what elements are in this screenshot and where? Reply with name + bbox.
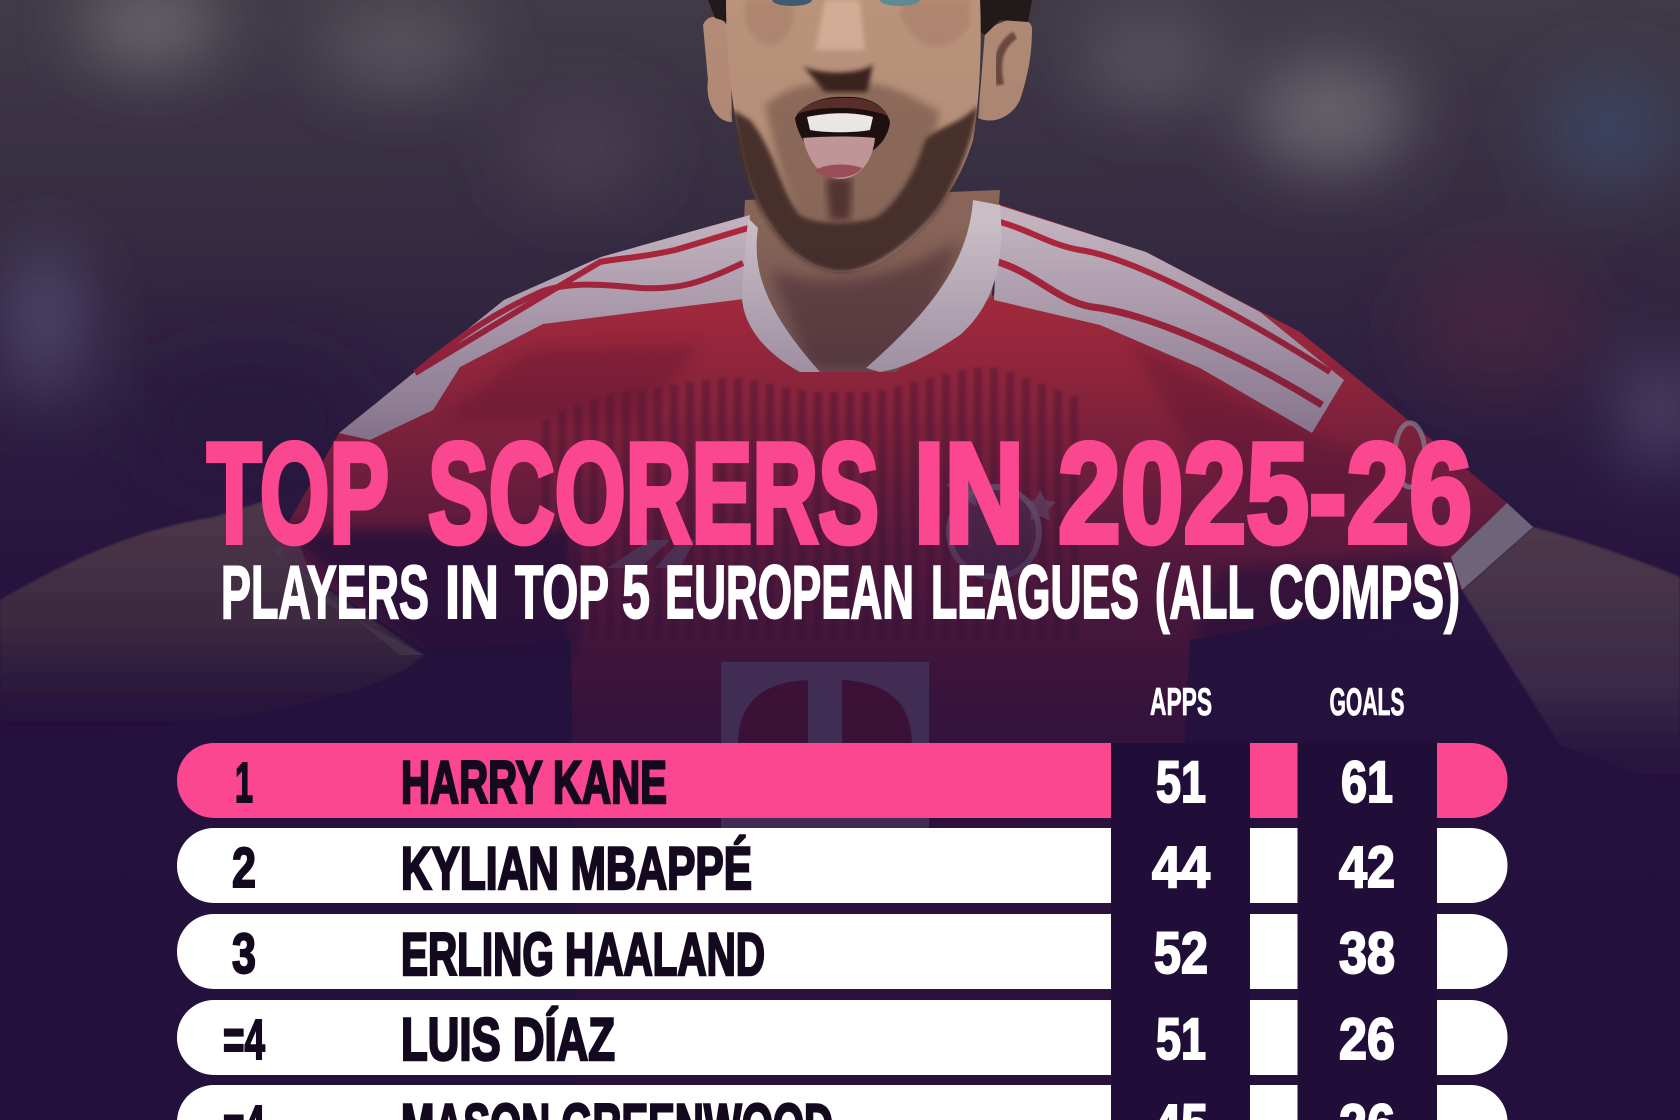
stubble mid tone bbox=[765, 82, 940, 235]
face bbox=[726, 0, 981, 272]
T logo on jersey bbox=[721, 662, 929, 832]
right sleeve shadow bbox=[1190, 555, 1462, 650]
tongue tip bbox=[815, 164, 862, 178]
left sleeve shadow bbox=[280, 528, 575, 660]
subtitle: PLAYERS bbox=[221, 550, 429, 634]
column heading: goals: GOALS bbox=[1330, 681, 1404, 724]
table row 1: Harry Kane: HARRY KANE bbox=[401, 749, 667, 816]
subtitle: EUROPEAN bbox=[665, 550, 914, 634]
table row 3: Erling Haaland: ERLING HAALAND bbox=[401, 921, 765, 988]
jersey body bbox=[272, 203, 1507, 1120]
eyes bbox=[772, 0, 812, 6]
title: TOP bbox=[207, 414, 389, 573]
right shoulder stripes bbox=[994, 205, 1344, 433]
collar bbox=[742, 218, 820, 372]
table row 2: Kylian Mbappé: 44 bbox=[1152, 835, 1210, 900]
left shoulder stripes bbox=[339, 215, 750, 440]
subtitle: COMPS) bbox=[1269, 550, 1460, 634]
table row 1: Harry Kane: 51 bbox=[1156, 750, 1206, 815]
sleeve badge bbox=[1395, 423, 1425, 487]
table row 4: Luis Díaz: 26 bbox=[1339, 1007, 1395, 1072]
column heading: apps: APPS bbox=[1150, 681, 1212, 724]
nostrils bbox=[803, 64, 873, 92]
subtitle: TOP bbox=[515, 550, 609, 634]
table row 4: Luis Díaz bbox=[177, 1000, 1508, 1075]
title: IN bbox=[914, 414, 1024, 573]
crest bbox=[946, 470, 1056, 577]
table row 1: Harry Kane: 61 bbox=[1341, 750, 1393, 815]
cheek shading bbox=[745, 0, 970, 46]
title: 2025-26 bbox=[1058, 414, 1472, 573]
left arm bbox=[0, 500, 424, 740]
table row 4: Luis Díaz: LUIS DÍAZ bbox=[401, 1006, 615, 1073]
neck bbox=[740, 190, 1000, 385]
subtitle: 5 bbox=[622, 550, 650, 634]
subtitle bbox=[221, 550, 1460, 634]
table row 3: Erling Haaland: 3 bbox=[232, 922, 256, 986]
right arm bbox=[1462, 527, 1680, 790]
stat column backing: apps bbox=[1111, 743, 1250, 1120]
title: SCORERS bbox=[428, 414, 879, 573]
right sleeve hem bbox=[1451, 503, 1533, 590]
kit manufacturer stripes bbox=[607, 540, 695, 568]
mouth bbox=[795, 97, 890, 158]
teeth bbox=[807, 113, 873, 132]
jersey ribbing bbox=[546, 368, 1074, 640]
soul patch bbox=[826, 178, 852, 220]
player photo illustration bbox=[272, 0, 1507, 1120]
table row 4: Luis Díaz: 51 bbox=[1156, 1007, 1206, 1072]
table row 5: Mason Greenwood bbox=[177, 1085, 1508, 1120]
table row 2: Kylian Mbappé bbox=[177, 828, 1508, 903]
table row 2: Kylian Mbappé: 42 bbox=[1339, 835, 1395, 900]
subtitle: IN bbox=[445, 550, 499, 634]
table row 3: Erling Haaland: 38 bbox=[1339, 921, 1395, 986]
title bbox=[207, 414, 1472, 573]
table row 4: Luis Díaz: =4 bbox=[223, 1008, 265, 1072]
ears bbox=[703, 17, 732, 122]
table row 1: Harry Kane bbox=[177, 743, 1508, 818]
table row 3: Erling Haaland bbox=[177, 914, 1508, 989]
stat column backing: goals bbox=[1298, 743, 1437, 1120]
table row 2: Kylian Mbappé: 2 bbox=[232, 836, 256, 900]
left sleeve hem bbox=[272, 535, 424, 655]
subtitle: (ALL bbox=[1155, 550, 1254, 634]
table row 1: Harry Kane: 1 bbox=[235, 751, 253, 815]
tongue bbox=[803, 136, 875, 179]
table row 2: Kylian Mbappé: KYLIAN MBAPPÉ bbox=[401, 835, 752, 902]
nose bridge highlight bbox=[815, 0, 865, 50]
hair bbox=[708, 0, 1032, 35]
upper lip bbox=[797, 98, 888, 116]
table row 3: Erling Haaland: 52 bbox=[1154, 921, 1208, 986]
jersey folds bbox=[440, 340, 1400, 540]
subtitle: LEAGUES bbox=[931, 550, 1139, 634]
beard bbox=[733, 105, 978, 272]
